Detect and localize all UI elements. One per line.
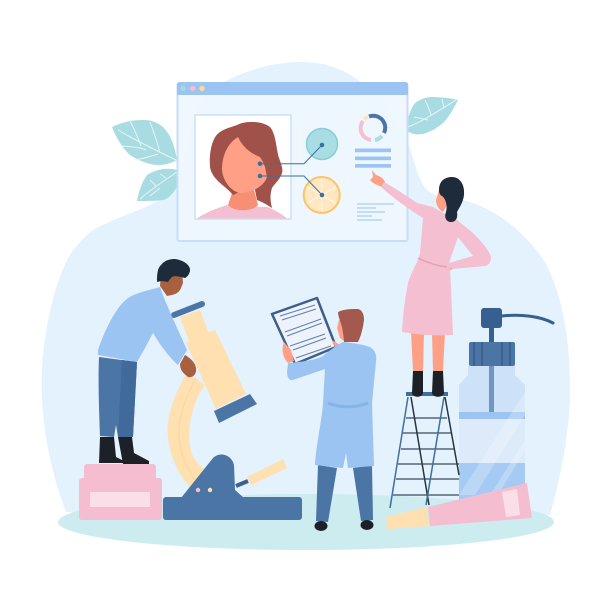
portrait photo [195,115,291,219]
ladder top [406,392,448,396]
microscope [163,304,302,520]
large left leaf [112,120,177,165]
front legs [390,397,444,508]
window panel [178,83,408,241]
boots [412,371,444,397]
ladder [390,394,459,508]
arm gap [449,237,473,263]
bottle body [459,366,525,500]
dress belt [418,258,447,267]
spout [502,315,553,323]
shoes [314,520,374,531]
man trousers [99,357,137,437]
coat [287,342,376,468]
microscope stand [181,454,244,498]
text bars [355,148,391,168]
window dots [180,86,205,91]
cream tube [386,483,532,529]
hands [283,340,340,363]
bottle [459,308,553,503]
leaf right [407,97,458,134]
man sweater [98,287,187,365]
floor ellipse [58,494,554,550]
microscope tube [174,304,257,423]
microscope base [163,497,302,520]
woman [370,170,491,397]
rungs [393,418,459,495]
microscope arm [168,373,207,490]
legs [411,332,445,371]
donut chart [361,116,385,140]
title bar [177,82,408,95]
connector lines [258,143,324,197]
jar [79,464,162,520]
hand [370,170,385,187]
small text lines [357,204,394,220]
waist hand [447,263,453,270]
focus handle [236,459,287,486]
dress [381,182,491,335]
pump head [481,308,502,328]
man boots [99,437,149,464]
highlights [459,392,525,495]
man head [157,259,190,296]
head [337,309,364,342]
coat belt [328,403,368,407]
stem [489,366,494,412]
citrus slice [304,177,340,213]
small left leaf [137,169,177,201]
man at microscope [98,259,196,464]
leaves left [112,120,177,201]
man hand [180,355,196,377]
back legs [411,397,459,505]
clipboard [272,298,336,364]
trousers [316,465,373,522]
background blob [42,62,570,530]
browser window [177,82,408,241]
teal cosmetic circle [306,128,338,160]
lab coat man [272,298,376,531]
cap [469,342,515,366]
head [436,177,464,222]
